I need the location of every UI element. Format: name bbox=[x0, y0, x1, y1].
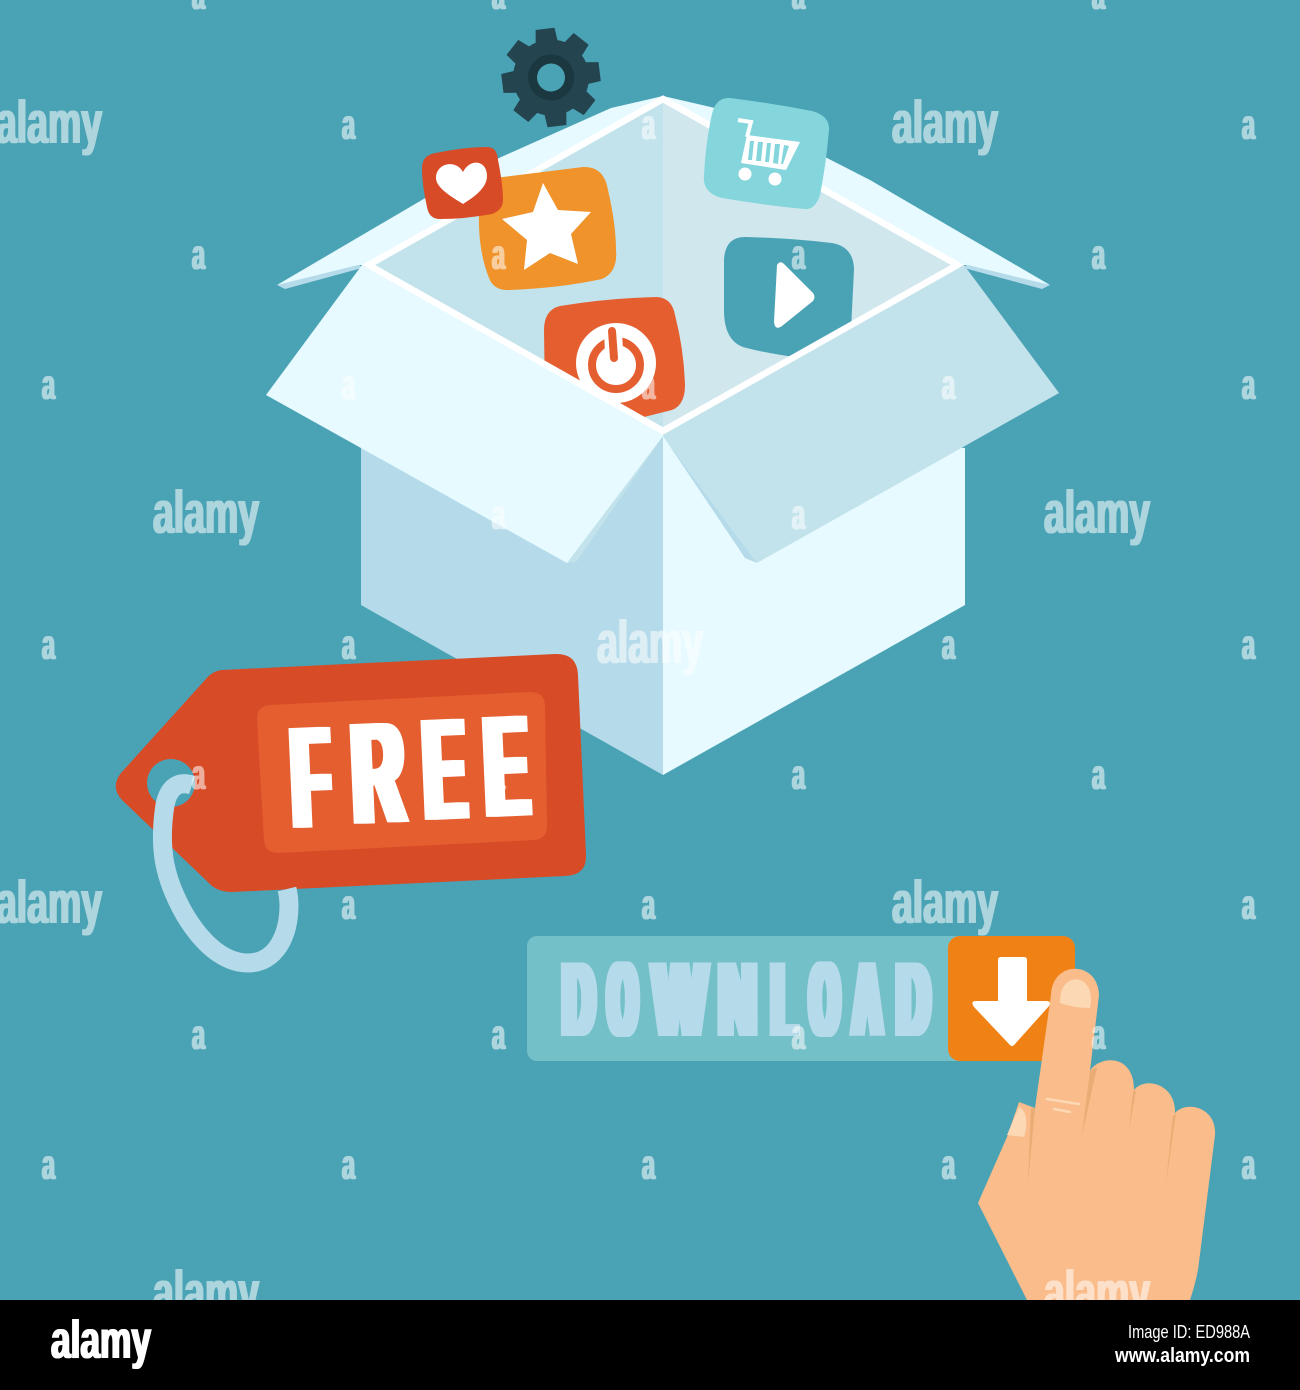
website address: www.alamy.com bbox=[1114, 1345, 1250, 1367]
tag label FREE: F bbox=[288, 695, 333, 859]
right back flap bbox=[663, 96, 1050, 289]
alamy watermarks: a bbox=[1092, 231, 1106, 279]
right front flap bbox=[663, 265, 1059, 563]
tag label FREE: R bbox=[349, 692, 407, 856]
alamy watermarks: a bbox=[792, 491, 806, 539]
image id: Image ID: ED988A bbox=[1128, 1322, 1250, 1342]
alamy watermarks: a bbox=[42, 361, 56, 409]
alamy watermarks: a bbox=[342, 621, 356, 669]
alamy watermarks: a bbox=[492, 231, 506, 279]
hand shape bbox=[978, 969, 1215, 1300]
button label bar bbox=[527, 936, 967, 1061]
alamy watermarks: a bbox=[492, 1011, 506, 1059]
icon tile: star bbox=[479, 167, 616, 290]
box left face bbox=[361, 430, 663, 775]
alamy watermarks: a bbox=[642, 881, 656, 929]
alamy watermarks: a bbox=[1242, 361, 1256, 409]
button label DOWNLOAD: O bbox=[608, 940, 637, 1059]
alamy watermarks: a bbox=[1092, 751, 1106, 799]
alamy watermarks: a bbox=[492, 491, 506, 539]
left back flap bbox=[277, 96, 663, 289]
front flaps of the box bbox=[266, 265, 1059, 563]
alamy watermarks: a bbox=[1242, 101, 1256, 149]
button label DOWNLOAD: D bbox=[897, 941, 929, 1059]
finger separation shadows bbox=[1028, 1067, 1176, 1183]
icon tile: play bbox=[724, 237, 854, 358]
alamy watermarks: a bbox=[342, 1141, 356, 1189]
open cardboard box: back flaps, body and interior bbox=[277, 96, 1050, 775]
alamy watermarks: alamy bbox=[1044, 479, 1150, 546]
icon: down arrow bbox=[972, 957, 1050, 1046]
box right face bbox=[663, 430, 965, 775]
footer logo: alamy bbox=[51, 1310, 151, 1370]
button orange square bbox=[948, 936, 1075, 1061]
icon tile: shopping cart bbox=[704, 98, 829, 209]
left front flap bbox=[266, 265, 663, 563]
price tag bbox=[116, 654, 586, 963]
box interior bbox=[368, 99, 958, 431]
thumbnail bbox=[1007, 1107, 1026, 1137]
alamy watermarks: a bbox=[642, 101, 656, 149]
hand pointing at the button bbox=[978, 969, 1215, 1300]
alamy watermarks: a bbox=[192, 1011, 206, 1059]
alamy watermarks: a bbox=[192, 231, 206, 279]
alamy watermarks: a bbox=[942, 361, 956, 409]
icon: gear bbox=[496, 23, 606, 132]
alamy watermarks: a bbox=[792, 1011, 806, 1059]
alamy watermarks: alamy bbox=[153, 1259, 259, 1326]
button label DOWNLOAD: O bbox=[810, 940, 839, 1059]
button label DOWNLOAD: A bbox=[853, 941, 882, 1060]
alamy watermarks: alamy bbox=[0, 869, 102, 936]
icon tile: power bbox=[544, 297, 685, 418]
alamy watermarks: a bbox=[42, 621, 56, 669]
knuckle creases bbox=[1047, 1099, 1079, 1112]
alamy watermarks: alamy bbox=[153, 479, 259, 546]
alamy watermarks: a bbox=[1242, 621, 1256, 669]
tag inner panel bbox=[257, 692, 547, 853]
alamy watermarks: alamy bbox=[892, 89, 998, 156]
alamy watermarks: a bbox=[942, 621, 956, 669]
alamy watermarks: a bbox=[792, 231, 806, 279]
tag string bbox=[162, 784, 289, 963]
alamy watermarks: alamy bbox=[892, 869, 998, 936]
alamy watermarks: alamy bbox=[597, 609, 703, 676]
button label DOWNLOAD: L bbox=[772, 941, 796, 1060]
icon tile: heart bbox=[422, 147, 503, 219]
alamy watermarks: a bbox=[342, 881, 356, 929]
button label DOWNLOAD: D bbox=[563, 940, 594, 1060]
alamy watermarks: a bbox=[192, 751, 206, 799]
button label DOWNLOAD: N bbox=[719, 939, 756, 1059]
black footer bar bbox=[0, 1300, 1300, 1390]
alamy watermarks: a bbox=[342, 101, 356, 149]
alamy watermarks: a bbox=[1242, 1141, 1256, 1189]
alamy watermarks: a bbox=[1092, 1011, 1106, 1059]
alamy watermarks: a bbox=[942, 1141, 956, 1189]
alamy watermarks: a bbox=[342, 361, 356, 409]
tag label FREE bbox=[288, 685, 531, 859]
white rim along the front opening bbox=[368, 265, 958, 431]
alamy watermarks: a bbox=[492, 751, 506, 799]
alamy watermarks: a bbox=[42, 1141, 56, 1189]
fingernail bbox=[1060, 979, 1091, 1008]
tag label FREE: E bbox=[481, 685, 531, 848]
button label DOWNLOAD: W bbox=[653, 940, 707, 1060]
alamy watermarks: a bbox=[642, 1141, 656, 1189]
download button bbox=[527, 936, 1075, 1061]
flap shadow slivers bbox=[567, 436, 757, 563]
alamy watermarks: a bbox=[792, 751, 806, 799]
alamy watermarks: a bbox=[642, 361, 656, 409]
tag label FREE: E bbox=[420, 687, 468, 851]
alamy watermarks: alamy bbox=[1044, 1259, 1150, 1326]
button label DOWNLOAD bbox=[563, 939, 929, 1060]
alamy watermarks: a bbox=[1242, 881, 1256, 929]
alamy watermarks: alamy bbox=[0, 89, 102, 156]
tag body bbox=[116, 654, 586, 892]
